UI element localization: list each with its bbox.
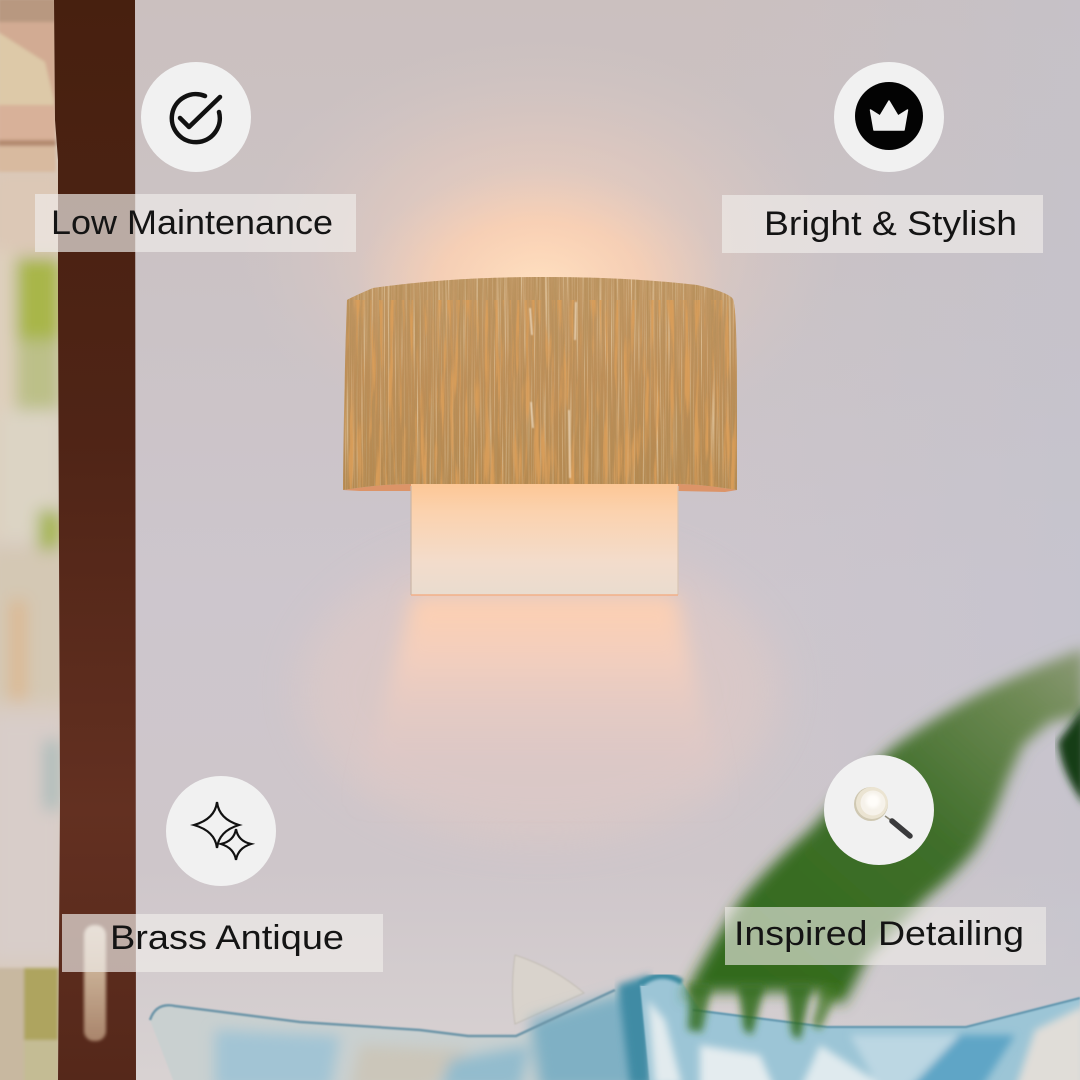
dark leaf at right edge <box>1058 705 1080 805</box>
label: low maintenance <box>35 194 356 252</box>
label: low maintenance: Low Maintenance <box>51 204 333 242</box>
glow above lamp <box>240 40 840 460</box>
icon: check badge <box>141 62 251 172</box>
upper woven shade <box>340 270 740 495</box>
wooden window frame <box>54 0 136 1080</box>
icon: magnifier badge <box>824 755 934 865</box>
label: bright and stylish <box>722 195 1043 253</box>
label: inspired detailing <box>725 907 1046 965</box>
leaf base fingers <box>688 985 842 1040</box>
pillow corner <box>512 955 584 1024</box>
icon: crown badge <box>834 62 944 172</box>
light slits in weave <box>530 302 576 478</box>
glow below lamp <box>300 540 780 840</box>
lower fabric shade <box>411 484 678 595</box>
feature: low maintenance <box>35 62 356 252</box>
plant leaves <box>682 648 1080 1040</box>
shade underside glow <box>343 484 737 492</box>
right cushion <box>640 976 1080 1080</box>
window view on the left <box>0 0 65 1080</box>
sofa cushions <box>150 955 1080 1080</box>
feature: brass antique <box>62 776 383 972</box>
icon: sparkle badge <box>166 776 276 886</box>
main leaf <box>682 648 1080 1005</box>
feature: inspired detailing <box>725 755 1046 965</box>
wall lamp <box>340 270 740 595</box>
feature: bright and stylish <box>722 62 1043 253</box>
label: brass antique <box>62 914 383 972</box>
label: inspired detailing: Inspired Detailing <box>734 915 1024 953</box>
label: brass antique: Brass Antique <box>110 919 344 957</box>
label: bright and stylish: Bright & Stylish <box>764 205 1017 243</box>
left cushion <box>150 975 650 1080</box>
